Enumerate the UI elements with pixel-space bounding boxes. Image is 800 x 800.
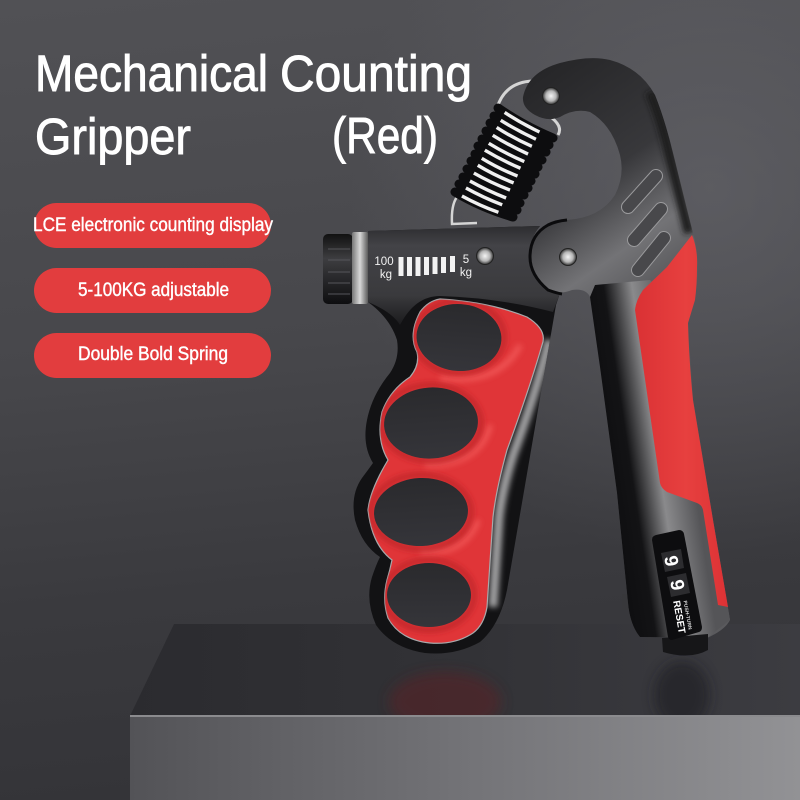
title: Counting <box>280 45 472 102</box>
pill: adjustable: 5-100KG adjustable <box>78 280 229 301</box>
moving lever <box>523 58 730 638</box>
weight scale: kg <box>380 269 392 281</box>
red finger grip <box>368 299 543 643</box>
weight scale: kg <box>460 267 472 279</box>
finger hole 3 <box>372 476 470 548</box>
pins <box>476 88 576 266</box>
reset label: RESET <box>670 600 687 634</box>
pill: display <box>33 203 273 248</box>
weight scale <box>374 254 472 281</box>
finger hole 2 <box>382 384 480 462</box>
weight scale: 5 <box>463 254 469 266</box>
lever grip panel <box>635 235 728 607</box>
pill: spring: Double Bold Spring <box>78 344 228 365</box>
table <box>130 624 800 800</box>
title: (Red) <box>332 107 438 164</box>
title: Gripper <box>35 108 191 165</box>
title: Mechanical <box>35 45 268 102</box>
pill: spring <box>34 333 271 378</box>
push-turn label: PUSH-TURN <box>682 600 693 631</box>
barrel <box>368 226 560 325</box>
digit window 2: 9 <box>665 578 688 592</box>
side screw <box>622 594 634 610</box>
weight scale: 100 <box>374 256 394 268</box>
spring with hooks <box>452 81 560 224</box>
end cap <box>662 634 708 656</box>
title <box>35 45 472 165</box>
feature pills <box>33 203 273 378</box>
finger hole 4 <box>387 563 471 627</box>
reflection: lever <box>654 661 710 729</box>
grip grooves <box>628 176 664 270</box>
digit window 1: 9 <box>659 554 682 568</box>
finger hole 1 <box>414 301 504 374</box>
adjustment knob <box>323 234 353 304</box>
pill: display: LCE electronic counting display <box>33 215 273 236</box>
chrome ring <box>352 232 368 304</box>
hand gripper <box>323 58 730 656</box>
counter display <box>652 530 702 640</box>
reflection: red grip <box>389 672 501 732</box>
fixed handle <box>354 226 560 654</box>
pill: adjustable <box>34 268 271 313</box>
